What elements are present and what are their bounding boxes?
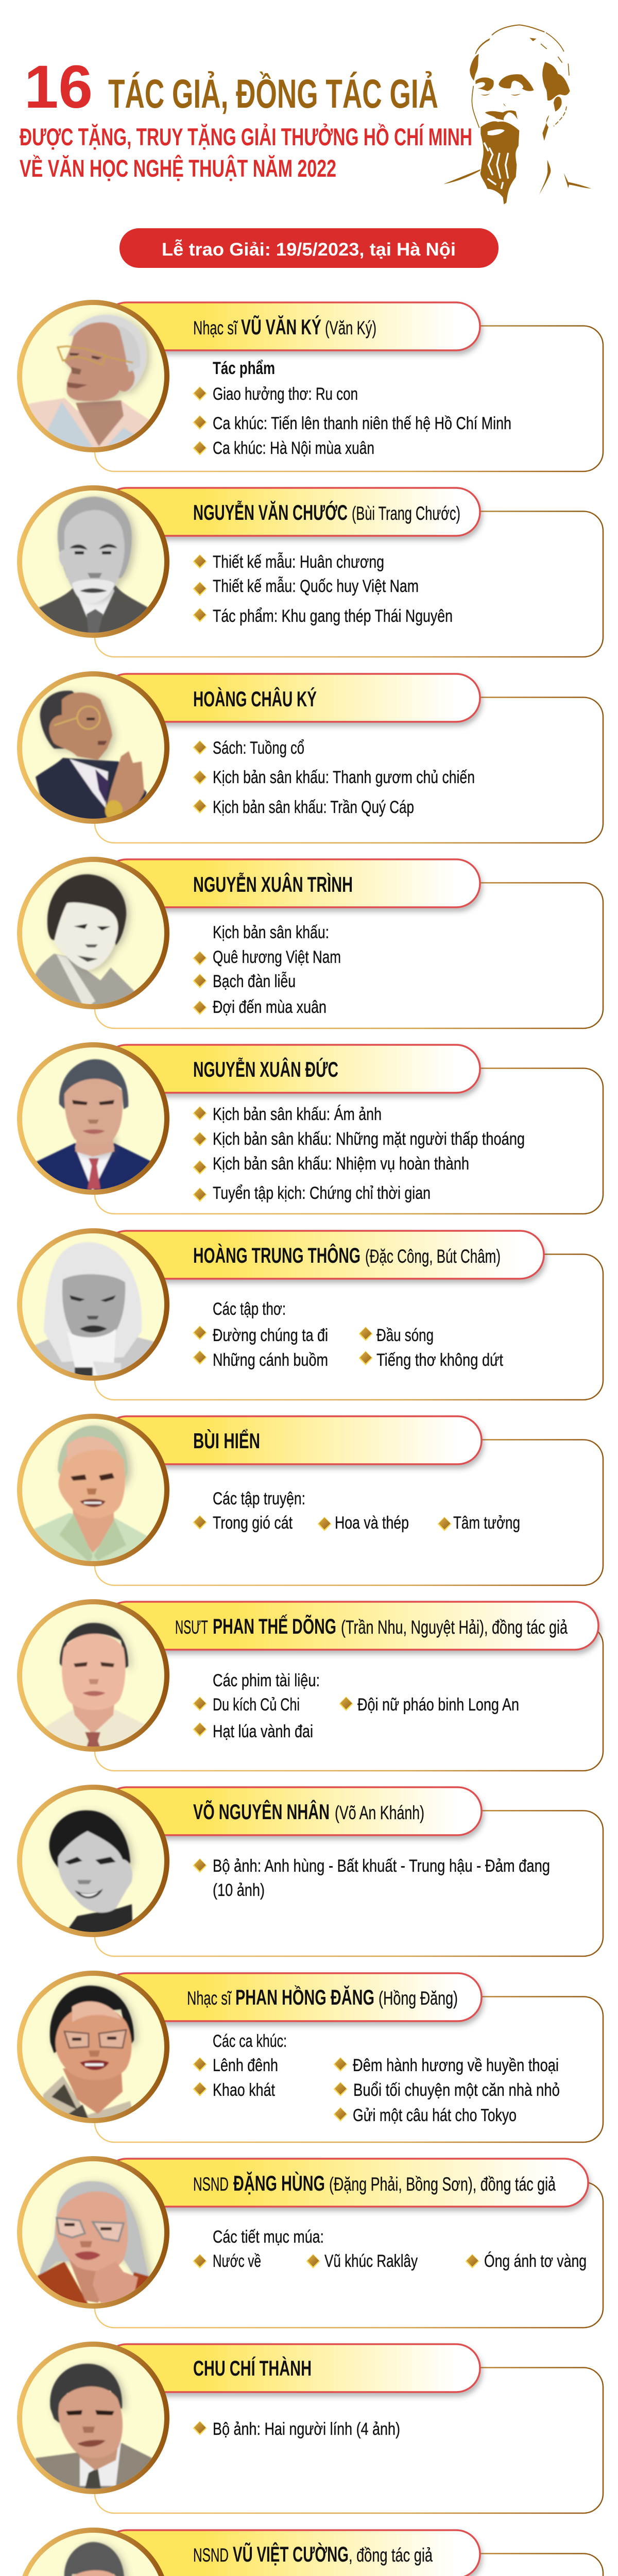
heading: NSND: [193, 2545, 229, 2566]
portrait: [36, 691, 147, 821]
works list: [193, 738, 475, 817]
portrait ring: [20, 488, 167, 635]
works list: Các tập thơ:: [213, 1299, 286, 1319]
outline box: [95, 2553, 603, 2576]
card 2: Nguyễn Văn Chước: [20, 488, 603, 657]
works list: Óng ánh tơ vàng: [484, 2251, 587, 2271]
portrait: [34, 1423, 147, 1561]
portrait ring: [20, 1231, 167, 1378]
works list: Du kích Củ Chi: [213, 1695, 300, 1715]
outline box: [95, 2368, 603, 2513]
name banner: [103, 1787, 482, 1835]
outline box: [95, 1810, 603, 1956]
works list: Tác phẩm: Khu gang thép Thái Nguyên: [213, 606, 453, 626]
works list: Đầu sóng: [376, 1326, 434, 1345]
outline box: [95, 511, 603, 657]
portrait: [36, 2181, 152, 2311]
works list: Ca khúc: Hà Nội mùa xuân: [213, 438, 374, 458]
heading: NSND: [193, 2174, 229, 2195]
works list: Trong gió cát: [213, 1513, 293, 1533]
name banner: [103, 1602, 598, 1650]
works list: Đợi đến mùa xuân: [213, 997, 327, 1017]
works list: [193, 923, 341, 1017]
works list: Thiết kế mẫu: Huân chương: [213, 552, 384, 572]
date text: Lễ trao Giải: 19/5/2023, tại Hà Nội: [162, 239, 456, 260]
portrait: [36, 1059, 152, 1197]
card 12: Chu Chí Thành: [20, 2344, 603, 2513]
works list: Thiết kế mẫu: Quốc huy Việt Nam: [213, 577, 419, 596]
works list: Các ca khúc:: [213, 2031, 287, 2051]
works list: Các tập truyện:: [213, 1489, 305, 1509]
heading: NGUYỄN VĂN CHƯỚC: [193, 500, 348, 524]
heading: (Võ An Khánh): [335, 1802, 424, 1823]
outline box: [95, 1625, 603, 1771]
outline box: [95, 326, 603, 471]
heading: BÙI HIỂN: [193, 1428, 260, 1453]
portrait ring: [20, 2159, 167, 2306]
works list: Hoa và thép: [335, 1513, 409, 1533]
heading: [193, 2171, 556, 2195]
heading: (Bùi Trang Chước): [352, 503, 460, 524]
heading: VÕ NGUYÊN NHÂN: [193, 1799, 330, 1824]
works list: [193, 1671, 519, 1741]
portrait ring: [20, 1416, 167, 1564]
works list: Hạt lúa vành đai: [213, 1722, 313, 1741]
card 9: Võ Nguyên Nhân: [20, 1787, 603, 1956]
heading: PHAN HỒNG ĐĂNG: [235, 1985, 374, 2009]
outline box: [95, 1439, 603, 1585]
heading: VŨ VIỆT CƯỜNG: [233, 2541, 349, 2566]
works list: Các phim tài liệu:: [213, 1671, 320, 1690]
card 3: Hoàng Châu Ký: [20, 674, 603, 843]
outline box: [95, 698, 603, 843]
works list: (10 ảnh): [213, 1880, 265, 1900]
works list: Kịch bản sân khấu: Những mặt người thấp thoáng: [213, 1129, 525, 1149]
card 8: Phan Thế Dõng: [20, 1602, 603, 1771]
works list: Khao khát: [213, 2080, 275, 2100]
portrait: [41, 1986, 135, 2125]
name banner: [103, 1045, 480, 1093]
works list: Đêm hành hương về huyền thoại: [353, 2056, 559, 2075]
works list: Tâm tưởng: [453, 1513, 520, 1533]
works list: Tuyển tập kịch: Chứng chỉ thời gian: [213, 1183, 431, 1203]
card 13: Vũ Việt Cường: [20, 2530, 603, 2576]
heading: (Đặc Công, Bút Châm): [365, 1246, 501, 1267]
works list: Giao hưởng thơ: Ru con: [213, 384, 358, 404]
works list: Những cánh buồm: [213, 1350, 328, 1370]
works list: Kịch bản sân khấu: Nhiệm vụ hoàn thành: [213, 1154, 469, 1174]
portrait: [23, 315, 154, 454]
heading: , đồng tác giả: [349, 2545, 433, 2566]
name banner: [103, 674, 480, 722]
card 7: Bùi Hiển: [20, 1416, 603, 1585]
portrait ring: [20, 1602, 167, 1749]
heading: NGUYỄN XUÂN TRÌNH: [193, 872, 353, 896]
name banner: [103, 1973, 482, 2021]
portrait ring: [20, 1045, 167, 1192]
works list: Đội nữ pháo binh Long An: [357, 1695, 519, 1715]
portrait: [38, 2542, 149, 2576]
works list: Ca khúc: Tiến lên thanh niên thế hệ Hồ Chí Minh: [213, 414, 511, 433]
heading: HOÀNG TRUNG THÔNG: [193, 1243, 360, 1267]
portrait ring: [20, 1787, 167, 1935]
portrait ring: [20, 1973, 167, 2121]
card 5: Nguyễn Xuân Đức: [20, 1045, 603, 1214]
name banner: [103, 488, 480, 536]
works list: Nước về: [213, 2251, 261, 2271]
heading: NSƯT: [175, 1617, 208, 1638]
title block: [20, 53, 472, 182]
portrait ring: [20, 859, 167, 1007]
works list: Vũ khúc Raklây: [324, 2251, 418, 2271]
name banner: [103, 1231, 544, 1279]
portrait: [31, 1242, 154, 1383]
works list: Tác phẩm: [213, 359, 275, 378]
works list: Kịch bản sân khấu: Ám ảnh: [213, 1105, 382, 1124]
outline box: [95, 883, 603, 1028]
portrait: [38, 495, 148, 633]
name banner: [103, 302, 480, 350]
works list: [193, 1299, 503, 1370]
works list: [193, 1856, 550, 1900]
works list: [193, 552, 453, 626]
heading: HOÀNG CHÂU KÝ: [193, 686, 317, 711]
works list: Gửi một câu hát cho Tokyo: [353, 2106, 517, 2125]
heading: (Văn Ký): [325, 317, 376, 338]
works list: [193, 2031, 560, 2125]
works list: Buổi tối chuyện một căn nhà nhỏ: [353, 2080, 560, 2100]
title line: authors: TÁC GIẢ, ĐỒNG TÁC GIẢ: [108, 71, 438, 116]
name banner: [103, 2530, 480, 2576]
portrait ring: [20, 2530, 167, 2576]
heading: ĐẶNG HÙNG: [233, 2171, 325, 2195]
heading: Nhạc sĩ: [193, 317, 238, 338]
portrait: [36, 2364, 152, 2496]
name banner: [103, 1416, 482, 1464]
heading: CHU CHÍ THÀNH: [193, 2356, 312, 2380]
name banner: [103, 2159, 588, 2207]
outline box: [95, 1254, 603, 1400]
portrait ring: [20, 302, 167, 450]
works list: Bộ ảnh: Hai người lính (4 ảnh): [213, 2419, 400, 2439]
works list: [193, 1489, 520, 1533]
card 10: Phan Hồng Đăng: [20, 1973, 603, 2142]
card 6: Hoàng Trung Thông: [20, 1231, 603, 1400]
portrait ring: [20, 674, 167, 821]
works list: Kịch bản sân khấu: Trần Quý Cáp: [213, 798, 414, 817]
outline box: [95, 2182, 603, 2328]
works list: Tiếng thơ không dứt: [376, 1350, 503, 1370]
name banner: [103, 859, 480, 907]
works list: Quê hương Việt Nam: [213, 947, 341, 967]
works list: Sách: Tuồng cổ: [213, 738, 304, 758]
portrait: [44, 1621, 145, 1747]
date pill: [119, 228, 499, 268]
outline box: [95, 1997, 603, 2142]
icon: Ho Chi Minh line portrait: [443, 25, 591, 205]
portrait ring: [20, 2344, 167, 2492]
works list: Kịch bản sân khấu:: [213, 923, 329, 942]
works list: Bạch đàn liễu: [213, 972, 296, 991]
outline box: [95, 1069, 603, 1214]
name banner: [103, 2344, 480, 2392]
card 4: Nguyễn Xuân Trình: [20, 859, 603, 1028]
heading: [193, 314, 376, 339]
card 1: Vũ Văn Ký: [20, 302, 603, 471]
heading: NGUYỄN XUÂN ĐỨC: [193, 1057, 338, 1081]
portrait: [49, 1810, 133, 1939]
works list: Các tiết mục múa:: [213, 2227, 324, 2247]
works list: Kịch bản sân khấu: Thanh gươm chủ chiến: [213, 768, 475, 787]
portrait: [35, 872, 135, 1004]
heading: PHAN THẾ DÕNG: [213, 1614, 336, 1638]
heading: [175, 1614, 568, 1638]
works list: [193, 1105, 525, 1203]
heading: VŨ VĂN KÝ: [241, 314, 321, 339]
works list: Đường chúng ta đi: [213, 1326, 328, 1345]
title number 16: 16: [24, 53, 93, 121]
card 11: Đặng Hùng: [20, 2159, 603, 2328]
subtitle line 2: VỀ VĂN HỌC NGHỆ THUẬT NĂM 2022: [20, 155, 336, 182]
heading: Nhạc sĩ: [187, 1988, 232, 2009]
works list: [193, 359, 511, 458]
works list: [193, 2227, 587, 2271]
works list: Lênh đênh: [213, 2056, 278, 2075]
heading: (Hồng Đăng): [379, 1988, 458, 2009]
